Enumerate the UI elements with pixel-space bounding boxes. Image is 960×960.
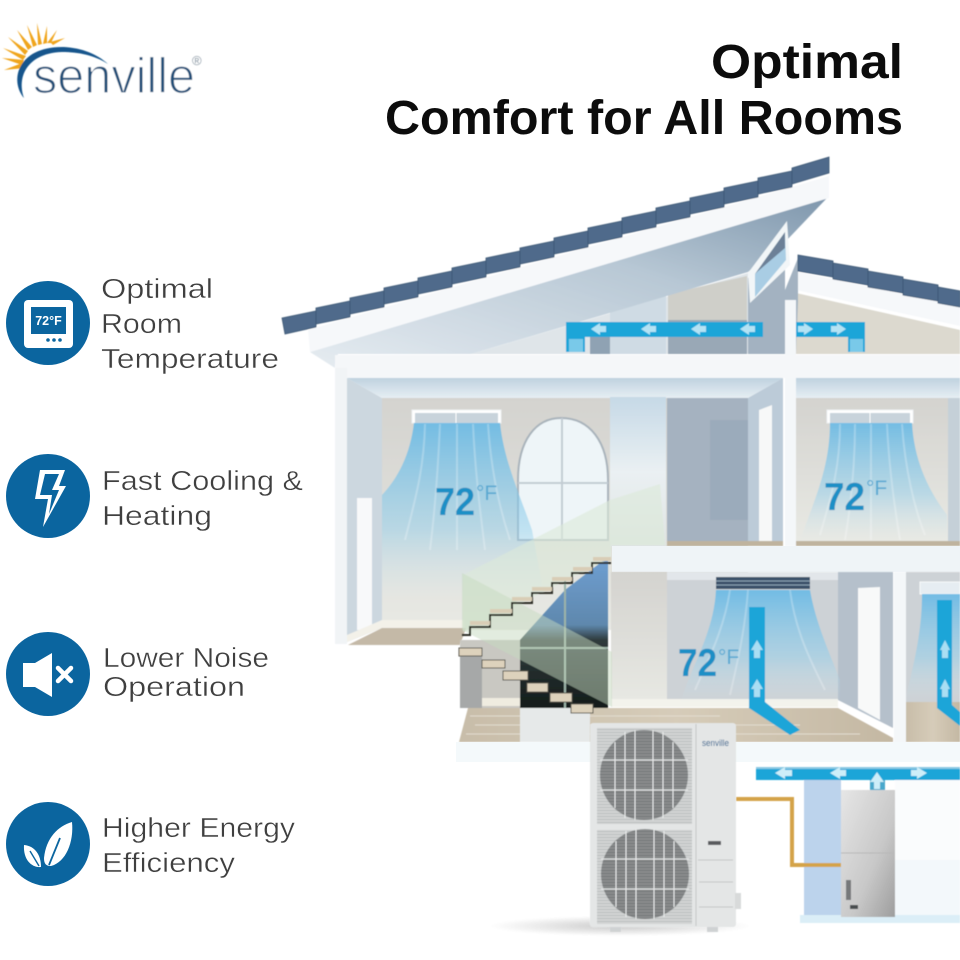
feature: higher energy efficiency	[6, 802, 295, 886]
column	[610, 397, 666, 547]
floor	[459, 708, 893, 742]
under stair room	[460, 640, 520, 708]
column	[611, 572, 667, 707]
icon: thermostat	[6, 281, 90, 365]
skirting	[611, 699, 838, 707]
white post	[894, 572, 906, 744]
ceiling vent left	[412, 410, 501, 423]
fan panel top	[597, 728, 692, 824]
attic duct left	[566, 322, 763, 352]
stair risers	[462, 563, 611, 635]
temperature 72F centre: °F	[718, 646, 739, 669]
icon: leaves	[6, 802, 90, 886]
lower slab	[456, 742, 960, 762]
temperature 72F right	[824, 476, 887, 519]
right attic wall	[796, 293, 960, 354]
lower floor	[459, 484, 960, 744]
basement wall	[804, 780, 841, 923]
ceiling vent right	[827, 410, 913, 423]
basement duct	[756, 767, 960, 790]
upper floor	[335, 355, 960, 645]
left floor	[348, 628, 466, 645]
title	[385, 36, 903, 145]
attic duct right	[796, 322, 865, 352]
basement air handler area	[736, 767, 960, 923]
airflow left	[382, 423, 545, 600]
side panel seams	[696, 724, 733, 926]
temperature 72F left: 72	[435, 481, 475, 524]
unit brand logo: senville	[702, 738, 729, 748]
white post	[785, 378, 796, 546]
feature label: Room	[101, 308, 182, 339]
unit feet	[610, 925, 718, 932]
duct arrows	[775, 767, 927, 789]
fan bottom	[601, 829, 689, 919]
feature label: Operation	[103, 671, 245, 702]
back wall	[667, 572, 838, 700]
feature: fast cooling and heating	[6, 454, 303, 538]
feature label: Higher Energy	[102, 812, 295, 843]
feature label	[101, 273, 279, 374]
stair treads	[470, 557, 611, 625]
icon: muted speaker	[6, 632, 90, 716]
feature label: Fast Cooling &	[102, 465, 303, 496]
clerestory window	[748, 221, 790, 303]
main roof fascia	[308, 176, 829, 352]
unit body	[590, 723, 736, 927]
temperature 72F left	[435, 481, 497, 524]
icon: sun rays	[2, 23, 65, 70]
right side wall	[748, 378, 783, 545]
ground shadow	[490, 916, 750, 936]
main roof soffit	[310, 198, 827, 368]
house cutaway illustration	[282, 157, 960, 936]
icon: thermostat: 72°F	[35, 314, 62, 328]
right roof gable column	[785, 258, 798, 354]
skirting	[347, 620, 465, 642]
outdoor condenser unit	[490, 723, 750, 936]
service valve	[735, 893, 741, 909]
duct arrows	[591, 323, 755, 335]
brand logo: senville	[2, 23, 202, 104]
left side wall	[347, 378, 382, 642]
feature label: Efficiency	[102, 847, 235, 878]
temperature 72F left: °F	[476, 482, 497, 505]
middle slab	[612, 546, 960, 572]
feature label: Lower Noise	[103, 642, 269, 673]
side wall	[838, 572, 893, 728]
feature label	[102, 812, 295, 878]
floor strip	[667, 541, 783, 546]
title line 1: Optimal	[711, 36, 903, 89]
fan panel bottom	[597, 830, 692, 924]
right room	[796, 378, 960, 546]
ceiling	[347, 378, 783, 398]
attic walls	[471, 273, 748, 354]
refrigerant pipes	[736, 799, 841, 865]
feature label: Temperature	[101, 343, 279, 374]
ceiling vent	[716, 577, 810, 589]
brand name: senville	[33, 48, 195, 104]
vertical supply duct centre	[749, 607, 800, 735]
airflow right	[800, 423, 947, 541]
attic level	[282, 157, 960, 368]
duct arrows	[751, 640, 763, 697]
feature label: Heating	[102, 500, 212, 531]
white post in attic	[785, 300, 796, 356]
right lower room	[905, 572, 960, 742]
registered mark: ®	[192, 53, 202, 68]
feature: optimal room temperature	[6, 273, 279, 374]
main roof tiles	[282, 157, 829, 334]
right roof fascia	[796, 272, 960, 326]
glass balustrade upper	[463, 484, 665, 632]
feature label	[103, 642, 269, 702]
door	[759, 405, 772, 543]
temperature 72F right: °F	[866, 477, 887, 500]
glass balustrade lower	[462, 573, 612, 707]
stairs lower flight	[459, 648, 593, 713]
small door	[357, 498, 372, 630]
feature label	[102, 465, 303, 531]
duct arrows	[798, 323, 846, 335]
feature list	[6, 273, 303, 886]
feature label: Optimal	[101, 273, 213, 304]
staircase window	[520, 557, 608, 708]
air handler	[841, 790, 895, 917]
fan top	[600, 730, 688, 820]
unit badge	[708, 841, 721, 845]
stairs upper flight	[462, 557, 611, 635]
airflow centre	[680, 590, 840, 702]
temperature 72F right: 72	[824, 476, 865, 519]
feature: lower noise operation	[6, 632, 269, 716]
back wall	[382, 398, 748, 630]
title line 2: Comfort for All Rooms	[385, 92, 903, 145]
door	[858, 587, 880, 720]
floor slab	[335, 355, 960, 378]
temperature 72F centre: 72	[678, 642, 717, 685]
left outer wall	[335, 368, 347, 644]
icon: lightning bolt	[6, 454, 90, 538]
duct arrows	[940, 640, 950, 697]
blue grey wall	[667, 398, 748, 543]
arched window	[518, 418, 608, 540]
right roof tiles	[798, 255, 960, 307]
icon: logo swoosh	[17, 47, 108, 98]
